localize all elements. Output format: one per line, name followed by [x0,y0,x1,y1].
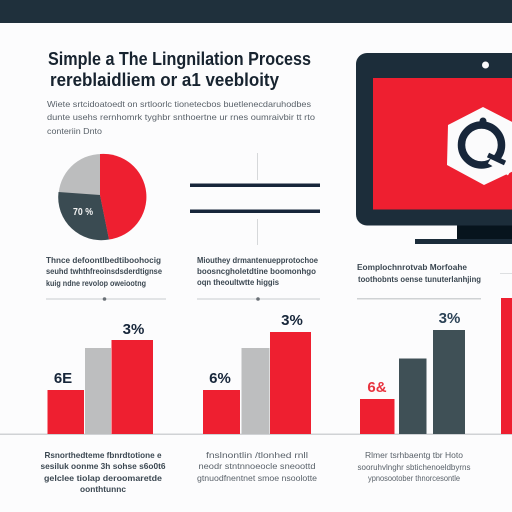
top header bar [0,0,512,23]
text block: chart 3 caption [358,450,470,483]
text block: chart 1 caption: sesiluk oonme 3h sohse s6o0t6 [40,461,166,471]
text block: pie caption [46,255,162,288]
text block: chart 3 caption: ypnosootober thnorcesontle [368,473,460,483]
text block: centre caption: Miouthey drmantenuepprotochoe [197,255,318,265]
camera dot [482,62,489,68]
text block: chart 1 caption [40,450,166,494]
monitor illustration [356,53,512,244]
bar chart 3: 6& [367,379,387,396]
partial red bar at right edge [501,298,512,434]
icon: hexagon magnifier logo [447,107,512,185]
text block: right caption: Eomplochnrotvab Morfoahe [357,262,467,272]
text block: chart 1 caption: Rsnorthedteme fbnrdtotione e [44,450,162,460]
monitor frame [356,53,512,226]
monitor stand [415,222,512,244]
pie chart: 70 % [73,207,93,218]
text block: centre caption: boosncgholetdtine boomonhgo [197,266,316,276]
text block: chart 2 caption: neodr stntnnoeocle sneoottd [198,461,316,471]
intro text block [47,99,315,136]
bar chart 2: 6% [209,370,231,387]
intro text block: dunte usehs rernhomrk tyghbr snthoertne ur rnes oumraivbir tt rto [47,112,315,122]
bar chart 3 [360,310,465,434]
text block: pie caption: Thnce defoontlbedtiboohocig [46,255,161,265]
bar chart 1: 3% [123,321,144,338]
title: rereblaidliem or a1 veebloity [50,70,279,90]
intro text block: Wiete srtcidoatoedt on srtloorlc tionetecbos buetlenecdaruhodbes [47,99,311,109]
text block: centre caption: oqn theoultwtte higgis [197,277,279,287]
title: Simple a The Lingnilation Process [48,49,311,69]
rule with dot [46,297,166,301]
text block: chart 1 caption: gelclee tiolap deroomaretde [44,473,162,483]
text block: right caption [357,262,481,284]
text block: chart 2 caption [197,450,317,483]
text block: chart 2 caption: fnslnontlin /tlonhed rnll [206,450,308,460]
intro text block: conteriin Dnto [47,126,102,136]
bar chart 3: 3% [439,310,460,327]
bar chart 2 [203,312,311,434]
text block: right caption: toothobnts oense tunuterlanhjing [358,274,481,284]
bar chart 1 [48,321,153,434]
equals-style divider lines [190,153,320,245]
text block: chart 2 caption: gtnuodfnentnet smoe nsoolotte [197,473,317,483]
text block: centre caption [197,255,318,287]
rule with dot [197,297,320,301]
text block: chart 1 caption: oonthtunnc [80,484,126,494]
text block: pie caption: seuhd twhthfreoinsdsderdtignse [46,266,162,276]
bar chart 1: 6E [54,370,72,387]
short rule at right edge [500,273,512,274]
rule [357,298,481,300]
pie chart [58,154,146,240]
text block: chart 3 caption: sooruhvlnghr sbtichenoeldbyrns [358,462,470,472]
monitor screen [373,78,512,210]
bar chart 2: 3% [281,312,303,329]
bar chart baseline [0,434,512,435]
title [48,49,311,90]
text block: chart 3 caption: Rlmer tsrhbaentg tbr Hoto [365,450,463,460]
text block: pie caption: kuig ndne revolop oweiootng [46,278,146,288]
